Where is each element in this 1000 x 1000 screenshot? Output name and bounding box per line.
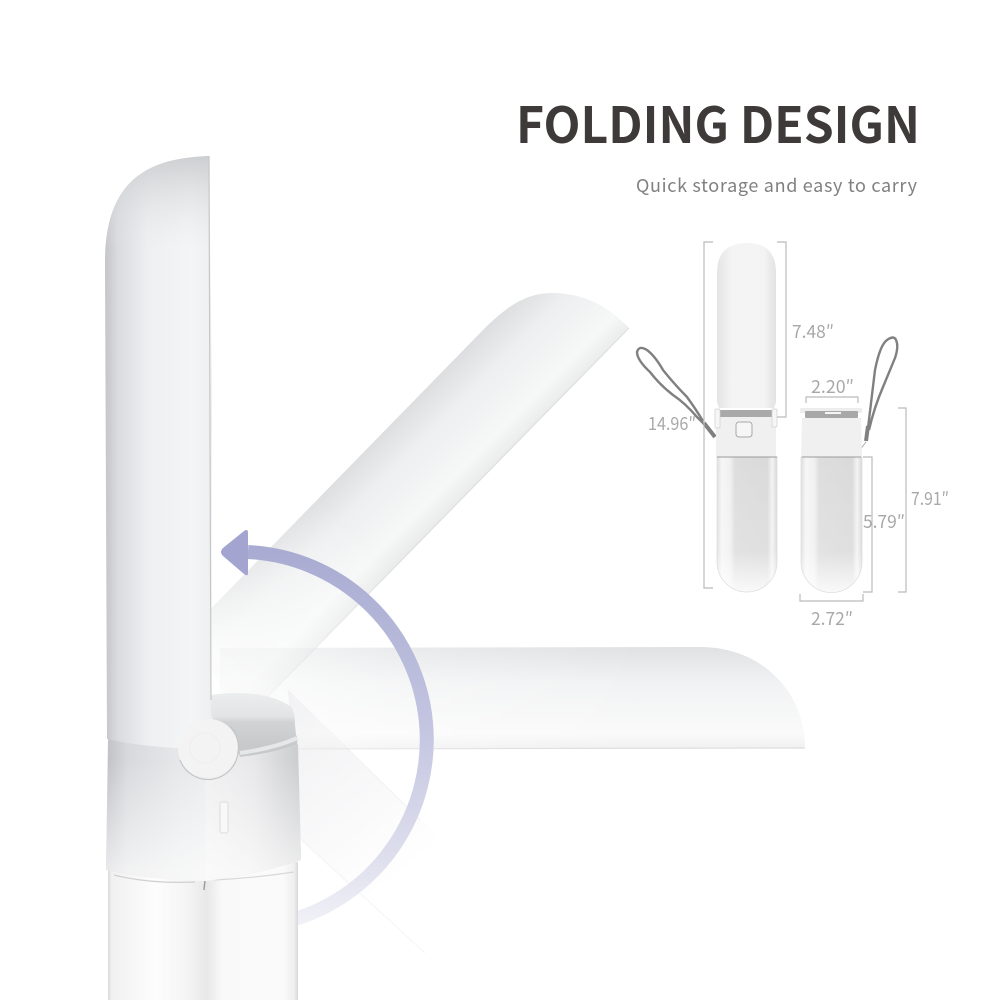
collar indent bbox=[220, 802, 228, 833]
mini open body bbox=[717, 457, 777, 592]
mini closed body bbox=[801, 457, 862, 592]
dimension labels: 2.72″ bbox=[811, 605, 853, 631]
dimension labels: 14.96″ bbox=[648, 410, 696, 436]
bottle body bbox=[108, 862, 298, 1000]
diagonal ghost lid bbox=[212, 293, 630, 690]
dimension labels: 5.79″ bbox=[863, 508, 905, 534]
mini closed cap bbox=[800, 408, 862, 457]
dimension labels: 7.48″ bbox=[792, 318, 834, 344]
mini closed strap bbox=[859, 338, 897, 451]
cap top bbox=[205, 693, 297, 762]
dimension labels bbox=[648, 318, 949, 631]
main lid upright bbox=[105, 156, 238, 780]
rotation arrow bbox=[221, 530, 427, 922]
subtitle: Quick storage and easy to carry bbox=[636, 172, 918, 198]
dimension brackets bbox=[704, 242, 906, 601]
mini open strap bbox=[637, 348, 715, 437]
collar bbox=[106, 739, 301, 881]
horizontal ghost lid bbox=[296, 647, 805, 750]
title: FOLDING DESIGN bbox=[516, 86, 920, 158]
third ghost lid: folded down bbox=[288, 690, 460, 990]
dimension labels: 2.20″ bbox=[811, 373, 854, 399]
mini open lid bbox=[717, 243, 776, 408]
mini open collar bbox=[715, 409, 777, 458]
mini bottle: open with lid bbox=[637, 243, 777, 592]
mini bottle: closed bbox=[800, 338, 897, 592]
dimension labels: 7.91″ bbox=[911, 485, 949, 511]
